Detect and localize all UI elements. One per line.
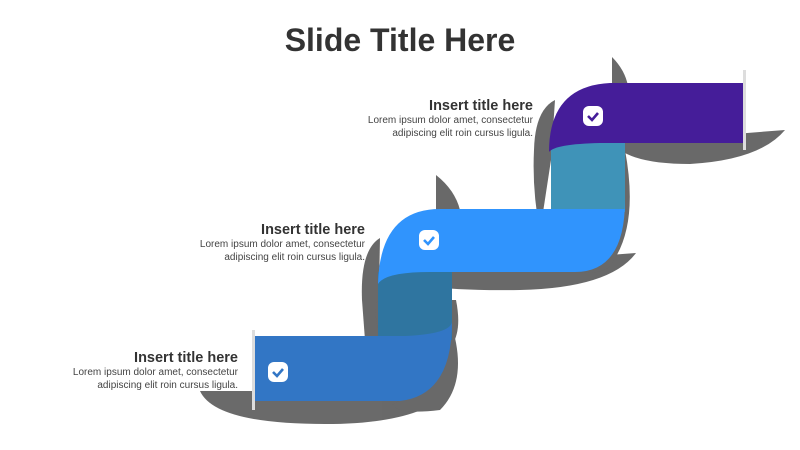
connector lower	[378, 272, 452, 340]
connector upper	[551, 143, 625, 212]
text: item 1: Insert title here	[134, 350, 238, 366]
text: item 3: adipiscing elit roin cursus ligula.	[392, 128, 533, 139]
band 1	[252, 322, 452, 410]
text: item 2	[200, 222, 365, 263]
text: item 1: adipiscing elit roin cursus ligula.	[97, 380, 238, 391]
text: item 1: Lorem ipsum dolor amet, consectetur	[73, 367, 238, 378]
icon: check 1	[268, 362, 288, 382]
text: item 3: Lorem ipsum dolor amet, consectetur	[368, 115, 533, 126]
band 2	[378, 200, 625, 284]
text: item 2: Lorem ipsum dolor amet, consectetur	[200, 239, 365, 250]
text: item 2: adipiscing elit roin cursus ligula.	[224, 252, 365, 263]
band 3	[549, 70, 746, 152]
icon: check 3	[583, 106, 603, 126]
text: item 2: Insert title here	[261, 222, 365, 238]
shadows	[200, 57, 785, 424]
text: item 3: Insert title here	[429, 98, 533, 114]
title: Slide Title Here	[285, 22, 515, 58]
text: item 3	[368, 98, 533, 139]
icon: check 2	[419, 230, 439, 250]
text: item 1	[73, 350, 238, 391]
